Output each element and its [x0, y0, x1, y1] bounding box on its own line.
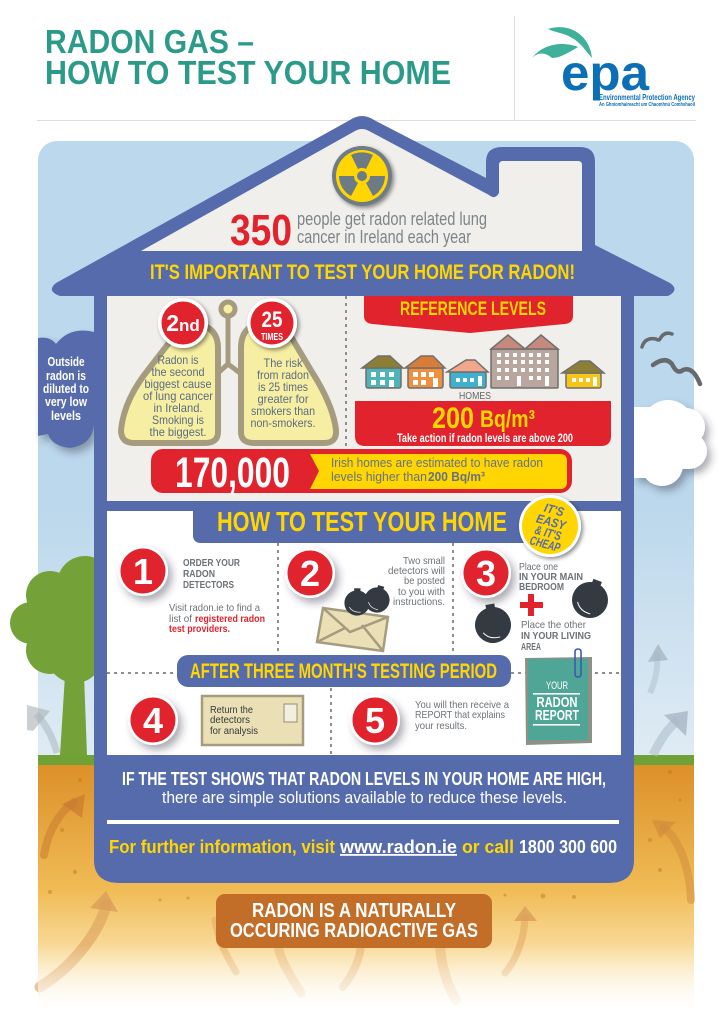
contact information: For further information, visit — [109, 837, 335, 857]
contact information: 1800 300 600 — [519, 837, 617, 857]
step 2: 2 — [300, 553, 320, 594]
step 4: detectors — [210, 714, 250, 726]
statistic: 350 people — [230, 206, 487, 255]
statistic: 350 people: cancer in Ireland each year — [297, 227, 471, 247]
icon: envelope — [317, 608, 388, 651]
step 3 second location: IN YOUR LIVING — [521, 630, 591, 642]
title: HOW TO TEST YOUR HOME — [45, 54, 451, 91]
text: second biggest cause: Radon is — [158, 353, 198, 367]
icon: radon report — [525, 649, 592, 745]
homes illustration — [362, 335, 604, 388]
icon: radon report: REPORT — [535, 707, 579, 724]
radon fact box: OCCURING RADIOACTIVE GAS — [230, 920, 478, 942]
step 5: your results. — [415, 720, 467, 732]
logo: EPA: epa — [561, 45, 650, 101]
logo: EPA: Environmental Protection Agency — [599, 93, 695, 102]
reference level box — [355, 401, 611, 446]
badge: easy and cheap: & IT'S — [533, 523, 563, 544]
after three months heading — [177, 655, 511, 687]
step 2: instructions. — [393, 596, 445, 608]
step 3: BEDROOM — [519, 581, 564, 593]
radiation icon — [332, 146, 392, 206]
homes label: HOMES — [459, 391, 491, 402]
text: 25 times risk: The risk — [264, 356, 303, 370]
house 2 — [405, 356, 445, 388]
contact information: www.radon.ie — [339, 837, 457, 857]
170,000 homes bar: levels higher than — [331, 469, 427, 484]
step 2: Two small — [403, 555, 445, 567]
badge: easy and cheap: IT'S — [543, 501, 566, 520]
text: second biggest cause: of lung cancer — [143, 389, 213, 403]
statistic: 350 people: people get radon related lung — [297, 209, 487, 229]
reference level box: Bq/m³ — [480, 406, 535, 433]
icon: detector left — [472, 601, 514, 646]
left cloud: outside radon: radon is — [46, 369, 86, 383]
170,000 homes bar: Irish homes are estimated to have radon — [331, 455, 543, 470]
house 5 — [562, 361, 604, 388]
apartment block — [491, 335, 558, 388]
badge: 25 times — [247, 298, 297, 348]
text: 25 times risk — [250, 356, 316, 430]
badge: 2nd — [158, 298, 208, 348]
badge: 25 times: 25 — [262, 307, 282, 332]
title: RADON GAS – — [45, 23, 254, 60]
how to test heading: HOW TO TEST YOUR HOME — [217, 506, 507, 537]
step 4: 4 — [143, 700, 163, 741]
text: second biggest cause: biggest cause — [144, 377, 212, 391]
step 1: Visit radon.ie to find a — [169, 602, 260, 614]
right cloud — [634, 400, 707, 486]
step 1: test providers. — [169, 623, 230, 635]
reference levels heading: REFERENCE LEVELS — [400, 299, 546, 320]
panel: how to test — [107, 511, 621, 755]
attic panel — [141, 129, 582, 251]
step 4 — [128, 695, 303, 745]
badge: easy and cheap — [519, 495, 581, 557]
170,000 homes bar — [151, 449, 572, 497]
banner heading: IT'S IMPORTANT TO TEST YOUR HOME FOR RADON! — [150, 261, 575, 284]
house 3 — [447, 360, 488, 388]
text: 25 times risk: greater for — [258, 392, 309, 406]
170,000 homes bar: 200 Bq/m³ — [428, 469, 486, 484]
high levels message — [122, 768, 606, 807]
panel: facts — [107, 296, 621, 501]
170,000 homes bar: 170,000 — [175, 449, 290, 497]
left cloud: outside radon: diluted to — [43, 382, 89, 396]
step 1: 1 — [133, 551, 153, 592]
text: 25 times risk: smokers than — [251, 404, 315, 418]
left cloud: outside radon — [38, 330, 94, 448]
tree — [10, 556, 113, 755]
step 1: RADON — [183, 568, 215, 580]
badge: 25 times: TIMES — [261, 332, 283, 343]
contact information — [109, 837, 617, 857]
badge: easy and cheap: CHEAP — [528, 533, 562, 555]
reference level box: Take action if radon levels are above 200 — [397, 433, 573, 445]
text: second biggest cause: the second — [152, 365, 204, 379]
step 4: Return the — [210, 704, 253, 716]
step 2: be posted — [404, 575, 445, 587]
badge: 2nd: 2nd — [166, 310, 200, 336]
logo: EPA: An Ghníomhaireacht um Chaomhnú Comhshaoil — [599, 102, 696, 108]
text: 25 times risk: is 25 times — [258, 380, 308, 394]
radon fact box: RADON IS A NATURALLY — [252, 900, 457, 922]
icon: detector right — [567, 574, 614, 623]
left cloud: outside radon: Outside — [48, 355, 85, 369]
house frame — [52, 116, 675, 883]
logo: EPA — [532, 27, 696, 108]
sky arrows — [27, 644, 688, 755]
how to test heading — [193, 506, 530, 543]
icon: plus — [520, 594, 543, 616]
reference levels heading — [364, 296, 573, 333]
text: second biggest cause: Smoking is — [152, 413, 204, 427]
step 5 — [350, 695, 509, 745]
step 1 — [118, 546, 265, 635]
icon: two detectors — [344, 583, 393, 616]
icon: radon report: YOUR — [546, 680, 568, 692]
text: 25 times risk: from radon — [257, 368, 309, 382]
step 2: detectors will — [388, 565, 445, 577]
after three months heading: AFTER THREE MONTH'S TESTING PERIOD — [190, 660, 497, 683]
lungs — [121, 302, 336, 443]
step 3: IN YOUR MAIN — [519, 571, 583, 583]
badge: easy and cheap: EASY — [535, 511, 569, 533]
step 3 second location — [521, 619, 591, 653]
scene background: sky, grass and soil — [38, 141, 694, 1024]
high levels message: there are simple solutions available to reduce these levels. — [162, 788, 567, 807]
step 3: Place one — [519, 561, 558, 573]
title — [45, 23, 451, 91]
step 4: for analysis — [210, 725, 258, 737]
birds — [642, 333, 700, 384]
step 2 — [285, 548, 445, 651]
step 5: You will then receive a — [415, 699, 509, 711]
step 1: list of — [169, 613, 192, 625]
step 1: registered radon — [195, 613, 265, 625]
icon: radon report: RADON — [536, 694, 578, 711]
reference level box: 200 — [432, 402, 474, 435]
left cloud: outside radon: levels — [51, 409, 81, 423]
contact information: or call — [462, 837, 514, 857]
left cloud: outside radon: very low — [45, 395, 87, 409]
radon fact box — [216, 894, 492, 948]
step 5: REPORT that explains — [415, 709, 505, 721]
text: second biggest cause — [143, 353, 213, 439]
step 1: DETECTORS — [183, 579, 234, 591]
text: second biggest cause: the biggest. — [150, 425, 206, 439]
step 2: to you with — [398, 586, 445, 598]
step 3 second location: AREA — [521, 641, 541, 653]
soil arrows: radon rising — [40, 794, 691, 1000]
step 5: 5 — [365, 700, 385, 741]
text: second biggest cause: in Ireland. — [154, 401, 202, 415]
text: 25 times risk: non-smokers. — [250, 416, 316, 430]
step 3: 3 — [476, 553, 496, 594]
house 1 — [362, 356, 403, 388]
statistic: 350 people: 350 — [230, 206, 292, 255]
step 3 — [461, 548, 583, 616]
step 1: ORDER YOUR — [183, 557, 240, 569]
step 3 second location: Place the other — [521, 619, 586, 631]
